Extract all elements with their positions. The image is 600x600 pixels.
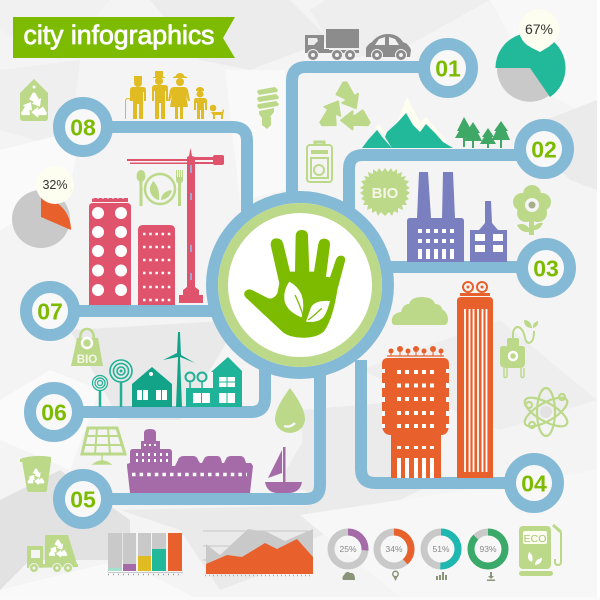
icon: recycling bin	[20, 456, 51, 492]
node 07: 07	[37, 298, 63, 324]
bar chart	[108, 533, 183, 574]
tower orange tall	[457, 282, 493, 478]
icon: energy bulb	[257, 87, 279, 129]
pie chart 32%	[12, 166, 74, 248]
donut 25%	[331, 532, 365, 580]
icon: battery	[307, 142, 332, 182]
node 08: 08	[70, 114, 96, 140]
title banner	[13, 17, 235, 58]
sailboat	[265, 447, 302, 493]
node 07	[26, 287, 74, 335]
icon: green hand	[244, 230, 345, 338]
node 08	[59, 103, 107, 151]
icon: BIO bag: BIO	[77, 354, 97, 366]
central hand emblem	[212, 197, 388, 373]
connector pipes	[50, 67, 546, 499]
icon: atom	[521, 388, 571, 436]
icon: recycling symbol	[315, 82, 373, 135]
icon: cloud	[392, 297, 448, 325]
donut 34%: 34%	[385, 544, 403, 554]
icon: truck and car	[305, 29, 411, 60]
ship	[127, 429, 253, 493]
building pink windows	[138, 225, 175, 305]
factory large	[407, 172, 464, 262]
trees	[455, 117, 510, 148]
icon: BIO badge: BIO	[372, 185, 399, 202]
house one	[132, 367, 172, 407]
donut 51%: 51%	[432, 544, 450, 554]
node 01	[424, 44, 472, 92]
icon: family	[125, 71, 224, 119]
node 01: 01	[435, 56, 461, 82]
wind turbine	[163, 332, 195, 407]
node 06	[30, 388, 78, 436]
icon: recycling truck	[27, 535, 78, 572]
icon: flower	[513, 185, 551, 235]
callout: 67%: 67%	[525, 21, 553, 37]
donut 51%	[424, 532, 458, 580]
title banner: city infographics	[24, 20, 214, 50]
lollipop trees	[92, 360, 132, 407]
donut 93%: 93%	[479, 544, 497, 554]
building orange lower	[382, 346, 449, 478]
icon: water drop	[275, 388, 305, 433]
building pink dots	[89, 197, 131, 305]
icon: plate and cutlery	[136, 170, 183, 206]
node 04	[510, 459, 558, 507]
donut 34%	[377, 532, 411, 581]
node 05: 05	[70, 486, 96, 512]
icon: recycling tag	[19, 79, 48, 121]
icon: eco fuel pump	[519, 525, 561, 576]
mountains	[362, 97, 453, 148]
donut 25%: 25%	[339, 544, 357, 554]
node 06: 06	[41, 400, 67, 426]
icon: BIO badge	[360, 168, 410, 216]
node 04: 04	[521, 470, 547, 496]
node 03	[522, 244, 570, 292]
crane	[127, 148, 224, 303]
node 02	[520, 125, 568, 173]
node 02: 02	[531, 136, 557, 162]
node 03: 03	[533, 256, 559, 282]
house two	[186, 357, 242, 407]
factory small	[470, 201, 507, 262]
node 05	[59, 475, 107, 523]
icon: eco fuel pump: ECO	[524, 533, 546, 545]
donut 93%	[471, 532, 505, 581]
icon: eco plug	[500, 320, 538, 378]
pie chart 67%	[495, 9, 565, 102]
area chart	[203, 529, 313, 576]
callout: 32%: 32%	[42, 178, 68, 192]
icon: solar panel	[82, 428, 125, 464]
icon: BIO bag	[71, 329, 103, 366]
